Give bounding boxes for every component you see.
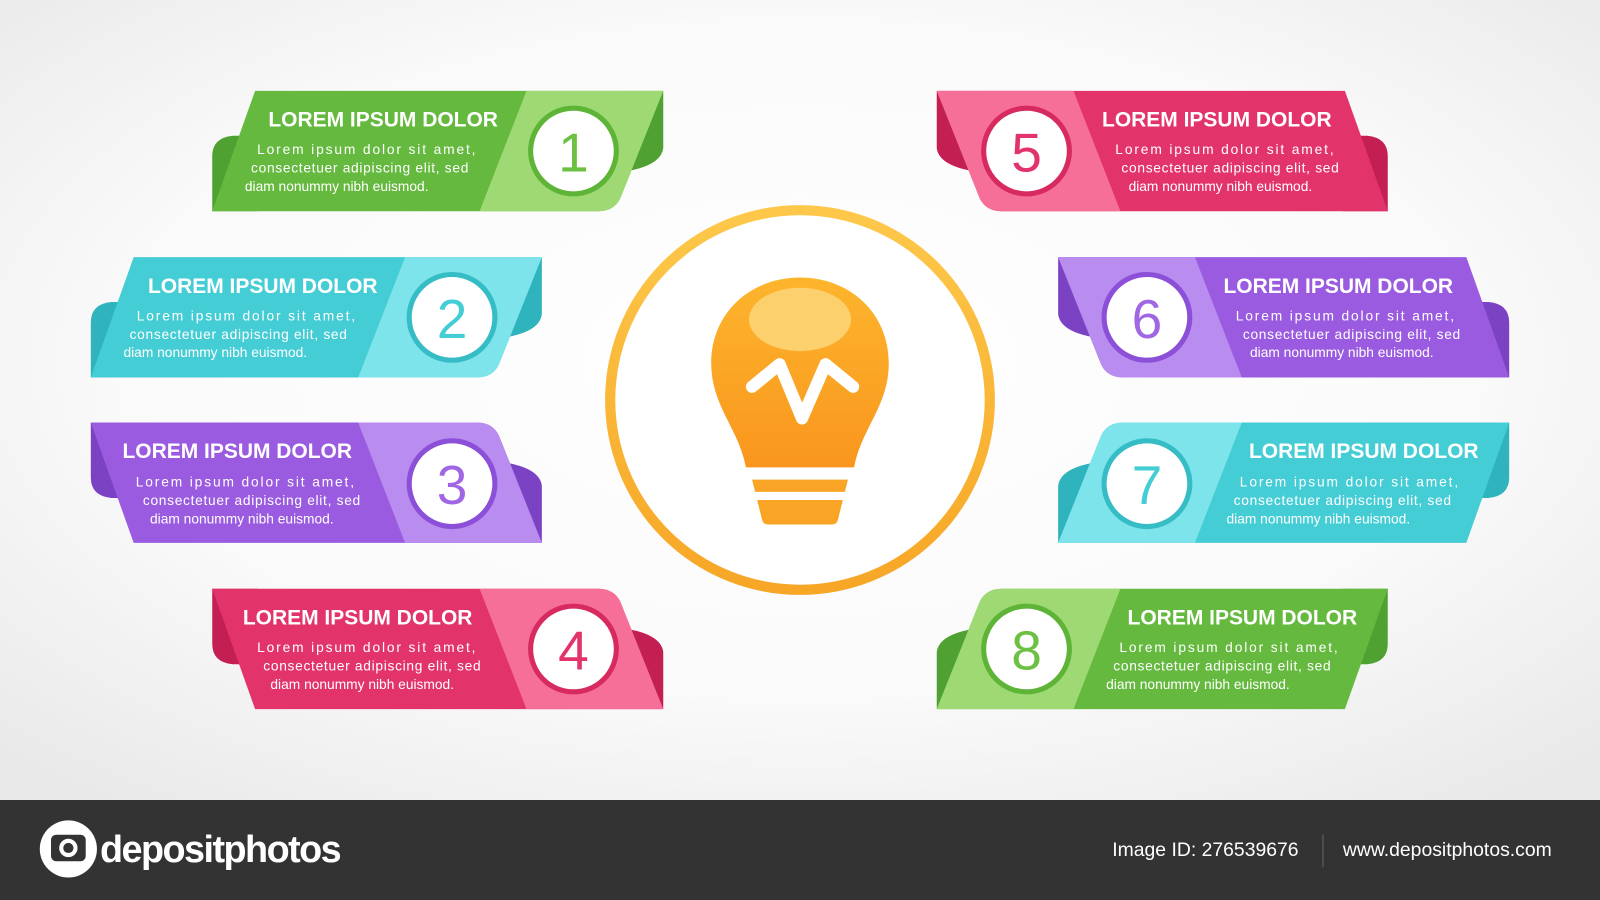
panel 1 — [212, 91, 663, 211]
number circle 3 — [409, 441, 495, 527]
ribbon shape 6 — [1058, 257, 1509, 378]
title 4: LOREM IPSUM DOLOR — [243, 605, 473, 629]
title 8: LOREM IPSUM DOLOR — [1128, 605, 1358, 629]
image id: Image ID: 276539676 — [1112, 839, 1299, 861]
number circle 5 — [984, 108, 1069, 194]
panel 3 — [91, 422, 542, 543]
number circle 2 — [409, 274, 495, 360]
number circle 1 — [531, 108, 616, 194]
number circle 8 — [984, 606, 1069, 692]
number circle 4 — [531, 606, 616, 692]
body text 4: diam nonummy nibh euismod. — [270, 677, 454, 692]
body text 5: consectetuer adipiscing elit, sed — [1121, 160, 1339, 175]
center ring — [610, 210, 990, 590]
body text 2 — [123, 308, 355, 360]
panel 7 — [1058, 422, 1509, 543]
number circle 8: 8 — [1011, 619, 1042, 681]
body text 2: diam nonummy nibh euismod. — [123, 345, 307, 360]
body text 7: consectetuer adipiscing elit, sed — [1234, 493, 1451, 508]
body text 1: Lorem ipsum dolor sit amet, — [257, 142, 476, 157]
logo icon — [40, 820, 97, 878]
body text 2: Lorem ipsum dolor sit amet, — [137, 308, 355, 323]
icon: light bulb — [711, 278, 889, 524]
ribbon shape 1 — [212, 91, 663, 211]
title 2: LOREM IPSUM DOLOR — [148, 274, 378, 298]
panel 8 — [937, 589, 1388, 709]
website: www.depositphotos.com — [1342, 839, 1552, 861]
body text 3: consectetuer adipiscing elit, sed — [143, 493, 360, 508]
body text 1 — [245, 142, 476, 194]
title 7: LOREM IPSUM DOLOR — [1249, 439, 1479, 463]
title 3: LOREM IPSUM DOLOR — [122, 439, 353, 463]
footer — [0, 800, 1600, 900]
body text 3: Lorem ipsum dolor sit amet, — [136, 475, 354, 490]
number circle 7 — [1104, 441, 1190, 527]
body text 7: Lorem ipsum dolor sit amet, — [1240, 475, 1458, 490]
panel 4 — [212, 589, 663, 709]
logo text: depositphotos — [100, 828, 341, 870]
title 1: LOREM IPSUM DOLOR — [268, 108, 498, 132]
number circle 4: 4 — [558, 619, 589, 681]
number circle 3: 3 — [437, 454, 467, 516]
body text 7: diam nonummy nibh euismod. — [1227, 511, 1410, 526]
number circle 2: 2 — [437, 288, 467, 350]
panel 2 — [91, 257, 542, 378]
body text 4 — [257, 640, 481, 692]
body text 5: Lorem ipsum dolor sit amet, — [1115, 142, 1334, 157]
ribbon shape 3 — [91, 422, 542, 543]
body text 4: consectetuer adipiscing elit, sed — [263, 658, 481, 673]
number circle 5: 5 — [1011, 121, 1042, 183]
body text 8: Lorem ipsum dolor sit amet, — [1119, 640, 1338, 655]
body text 6 — [1236, 308, 1460, 360]
body text 8: diam nonummy nibh euismod. — [1106, 677, 1290, 692]
body text 4: Lorem ipsum dolor sit amet, — [257, 640, 476, 655]
body text 1: diam nonummy nibh euismod. — [245, 179, 429, 194]
body text 6: Lorem ipsum dolor sit amet, — [1236, 308, 1454, 323]
body text 5 — [1115, 142, 1339, 194]
body text 3: diam nonummy nibh euismod. — [150, 511, 334, 526]
body text 8 — [1106, 640, 1338, 692]
body text 8: consectetuer adipiscing elit, sed — [1113, 658, 1331, 673]
body text 1: consectetuer adipiscing elit, sed — [251, 160, 468, 175]
number circle 1: 1 — [558, 121, 589, 183]
body text 6: consectetuer adipiscing elit, sed — [1243, 327, 1460, 342]
body text 7 — [1227, 475, 1458, 526]
body text 5: diam nonummy nibh euismod. — [1129, 179, 1312, 194]
title 5: LOREM IPSUM DOLOR — [1102, 108, 1332, 132]
body text 2: consectetuer adipiscing elit, sed — [130, 327, 347, 342]
body text 3 — [136, 475, 360, 526]
ribbon shape 8 — [937, 589, 1388, 709]
number circle 6 — [1104, 274, 1190, 360]
title 6: LOREM IPSUM DOLOR — [1223, 274, 1454, 298]
ribbon shape 7 — [1058, 422, 1509, 543]
panel 5 — [937, 91, 1388, 211]
ribbon shape 4 — [212, 589, 663, 709]
panel 6 — [1058, 257, 1509, 378]
body text 6: diam nonummy nibh euismod. — [1250, 345, 1434, 360]
number circle 6: 6 — [1132, 288, 1162, 350]
number circle 7: 7 — [1132, 454, 1162, 516]
ribbon shape 2 — [91, 257, 542, 378]
ribbon shape 5 — [937, 91, 1388, 211]
